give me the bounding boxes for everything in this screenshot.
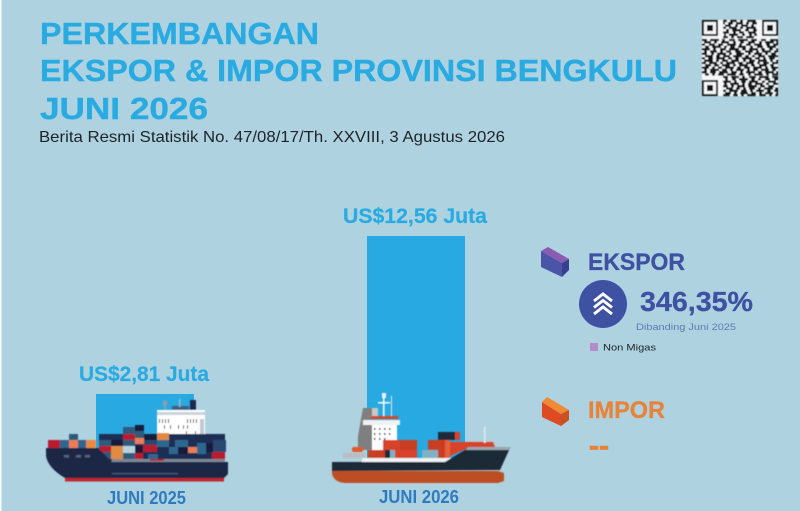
value label: Juni 2026: US$12,56 Juta	[343, 205, 487, 228]
bar: Juni 2025	[96, 394, 194, 460]
bar: Juni 2026	[367, 236, 465, 462]
hull	[332, 448, 510, 471]
heading: ekspor: EKSPOR	[588, 249, 685, 276]
icon: purple container	[541, 247, 569, 277]
legend: non migas: Non Migas	[603, 342, 656, 354]
axis label: Juni 2026: JUNI 2026	[379, 487, 459, 507]
subtitle: publication reference: Berita Resmi Statistik No. 47/08/17/Th. XXVIII, 3 Agustus 2026	[39, 129, 505, 146]
icon: orange container	[542, 397, 569, 426]
caption: comparison: Dibanding Juni 2025	[636, 322, 736, 333]
QR code	[702, 20, 778, 96]
title: EKSPOR & IMPOR PROVINSI BENGKULU	[40, 54, 677, 88]
axis label: Juni 2025: JUNI 2025	[107, 488, 186, 508]
panel: ekspor	[541, 247, 753, 354]
hull	[46, 448, 228, 478]
value label: Juni 2025: US$2,81 Juta	[79, 363, 209, 386]
cargo containers	[362, 427, 495, 462]
title	[40, 17, 677, 126]
superstructure	[343, 393, 400, 458]
icon: container ship 2025	[46, 399, 228, 482]
value: ekspor growth: 346,35%	[640, 286, 753, 317]
superstructure	[157, 399, 205, 446]
heading: impor: IMPOR	[588, 397, 665, 424]
cargo containers	[48, 425, 226, 462]
panel: impor	[542, 397, 665, 461]
icon: cargo ship 2026	[332, 393, 511, 483]
icon: up chevrons	[579, 280, 627, 328]
title: JUNI 2026	[40, 92, 208, 126]
legend: non migas	[590, 342, 656, 354]
value: no data: --	[589, 430, 609, 461]
title: PERKEMBANGAN	[40, 17, 319, 51]
